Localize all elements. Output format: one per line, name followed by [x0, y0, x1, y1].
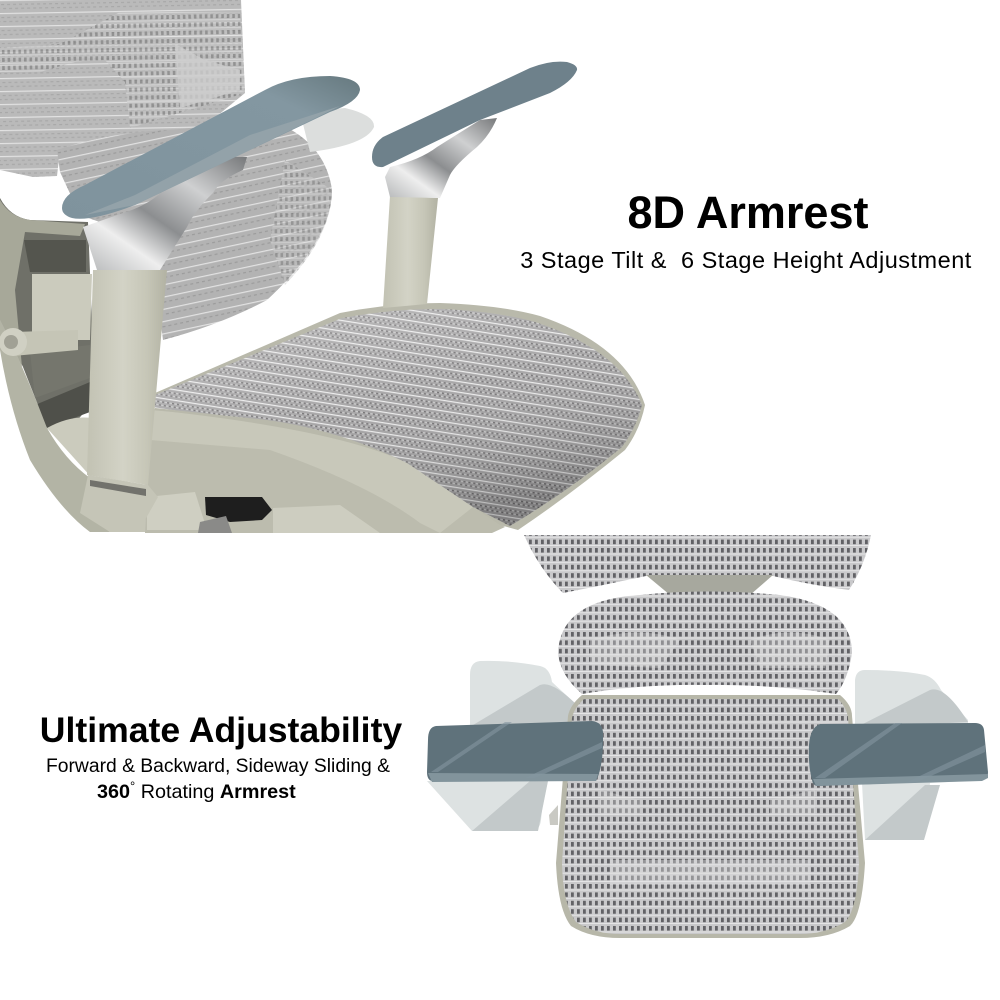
heading: Ultimate Adjustability: Ultimate Adjustability: [40, 710, 402, 750]
near post collar: [80, 475, 158, 532]
left ghost armrests: [427, 661, 578, 831]
far arm post: [383, 196, 438, 308]
far armrest pad: [372, 62, 577, 167]
seat pivot: [549, 805, 558, 825]
text: tilt and height adjustment: 3 Stage Tilt & 6 Stage Height Adjustment: [520, 247, 972, 273]
right armrest pad: [809, 723, 988, 786]
top view headrest: [558, 592, 852, 694]
near armrest bracket: [83, 157, 247, 270]
seat lever: [198, 497, 272, 533]
photo: top view of chair: [427, 535, 988, 938]
right ghost armrests: [855, 670, 987, 840]
ghost armrest tilt: [300, 108, 374, 152]
heading: 8D Armrest: 8D Armrest: [628, 187, 868, 238]
far armrest bracket: [385, 118, 497, 198]
seat base frame: [145, 408, 505, 533]
text: 360 rotating armrest: 360° Rotating Armrest: [97, 778, 296, 803]
seat mesh: [155, 309, 642, 526]
lumbar mesh: [57, 120, 332, 340]
neck frame: [646, 575, 773, 595]
side frame and mechanism: [0, 198, 110, 532]
seat rim: [155, 303, 645, 530]
photo: side view of armrests and seat: [0, 0, 645, 533]
near armrest pad: [62, 76, 360, 219]
top view backrest: [524, 535, 871, 593]
top view seat frame: [556, 695, 865, 938]
upper back mesh: [0, 0, 245, 177]
near arm post: [87, 270, 167, 485]
top view seat mesh: [562, 699, 859, 934]
text: forward and backward description: Forward & Backward, Sideway Sliding &: [46, 756, 390, 777]
left armrest pad: [427, 721, 603, 782]
